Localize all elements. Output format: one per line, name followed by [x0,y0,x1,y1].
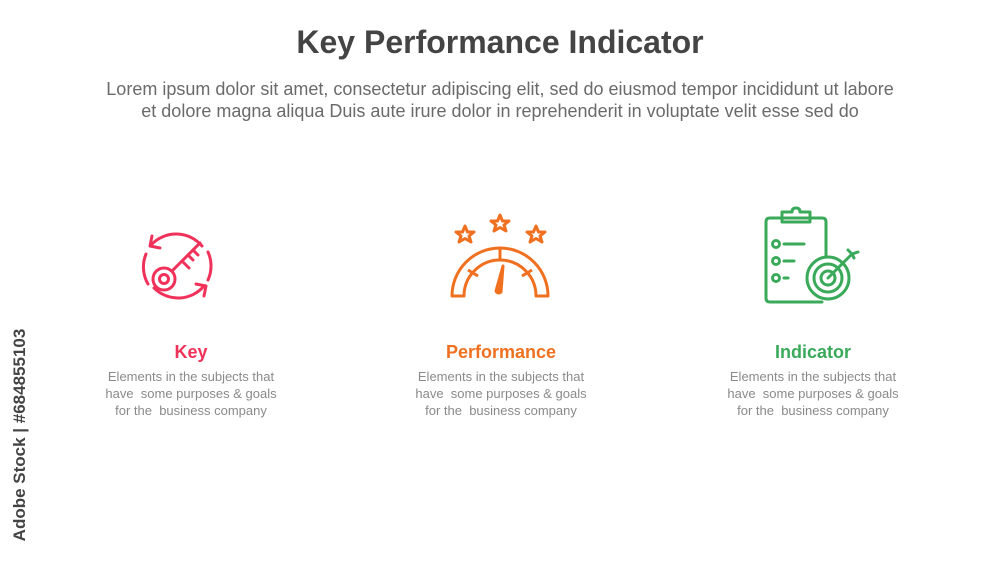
icon: key with cycle arrows [142,232,212,300]
watermark side text: Adobe Stock | #684855103 [10,329,29,541]
subtitle paragraph [106,79,894,121]
column: Key: for the business company [115,403,267,418]
icon: speedometer with stars [450,214,550,298]
subtitle paragraph: et dolore magna aliqua Duis aute irure dolor in reprehenderit in voluptate velit esse sed do [141,101,859,121]
column: Indicator: Elements in the subjects that [730,369,896,384]
column: Performance: have some purposes & goals [415,386,587,401]
column: Key [105,342,277,418]
subtitle paragraph: Lorem ipsum dolor sit amet, consectetur adipiscing elit, sed do eiusmod tempor incididunt ut labore [106,79,894,99]
column: Indicator [727,342,899,418]
icon: clipboard with target [764,206,860,304]
column: Performance: Performance [446,342,556,362]
column: Key: have some purposes & goals [105,386,277,401]
column: Performance: Elements in the subjects that [418,369,584,384]
column: Indicator: Indicator [775,342,851,362]
column: Indicator: have some purposes & goals [727,386,899,401]
column: Indicator: for the business company [737,403,889,418]
column: Key: Elements in the subjects that [108,369,274,384]
column: Key: Key [174,342,208,362]
column: Performance [415,342,587,418]
column: Performance: for the business company [425,403,577,418]
title: Key Performance Indicator [296,24,704,60]
